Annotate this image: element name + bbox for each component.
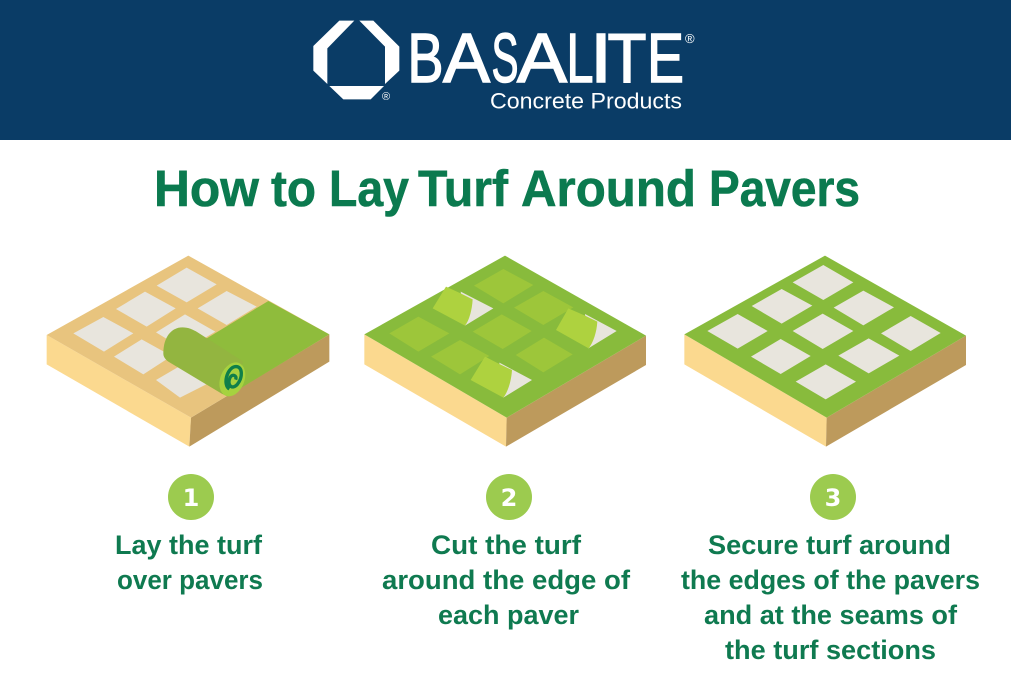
- logo wordmark: E: [647, 19, 684, 97]
- logo tagline: Concrete Products: [490, 88, 682, 114]
- step 2 caption: Cut the turf: [431, 530, 581, 560]
- title: How: [154, 160, 259, 217]
- logo wordmark: A: [517, 19, 567, 97]
- cut flap 1: [433, 287, 493, 326]
- turf roll: [163, 327, 243, 396]
- title: Pavers: [709, 160, 860, 217]
- step 3 badge: [810, 474, 856, 520]
- step 2 badge: 2: [501, 484, 517, 512]
- step 1 badge: [168, 474, 214, 520]
- title: to: [271, 160, 316, 217]
- step 1 caption: [115, 530, 263, 595]
- step 1: [115, 474, 263, 595]
- step 3 badge: 3: [825, 484, 841, 512]
- header band with logo: [0, 0, 1011, 140]
- step 2 caption: around the edge of: [382, 565, 630, 595]
- logo wordmark: B: [408, 19, 444, 97]
- step 1 caption: over pavers: [117, 565, 263, 595]
- illustration 3: secured turf around pavers: [684, 256, 966, 447]
- logo wordmark: L: [566, 19, 594, 97]
- title: Turf: [418, 160, 509, 217]
- step 3 caption: Secure turf around: [708, 530, 951, 560]
- logo wordmark: A: [443, 19, 490, 97]
- logo wordmark: I: [590, 19, 612, 97]
- step 2 caption: each paver: [438, 600, 579, 630]
- logo wordmark: S: [492, 19, 518, 97]
- registered mark: octagon: ®: [382, 91, 390, 103]
- step 3 caption: [681, 530, 980, 665]
- logo wordmark: T: [608, 19, 646, 97]
- illustration 2: turf cut around pavers: [364, 256, 646, 447]
- logo mark: octagon: [313, 21, 399, 99]
- step 3 caption: the edges of the pavers: [681, 565, 980, 595]
- step 2: [382, 474, 630, 630]
- turf sheet: [207, 301, 329, 396]
- step 2 badge: [486, 474, 532, 520]
- title: Lay: [329, 160, 410, 217]
- cut flap 2: [556, 308, 617, 348]
- step 2 caption: [382, 530, 630, 630]
- registered mark: wordmark: ®: [685, 31, 695, 46]
- step 3 caption: and at the seams of: [704, 600, 957, 630]
- title: Around: [521, 160, 696, 217]
- step 3: [681, 474, 980, 665]
- step 1 caption: Lay the turf: [115, 530, 262, 560]
- illustration 1: turf rolled over pavers: [47, 256, 329, 447]
- step 3 caption: the turf sections: [725, 635, 936, 665]
- roll end spiral: [215, 358, 250, 400]
- step 1 badge: 1: [183, 484, 199, 512]
- cut flap 3: [471, 357, 532, 398]
